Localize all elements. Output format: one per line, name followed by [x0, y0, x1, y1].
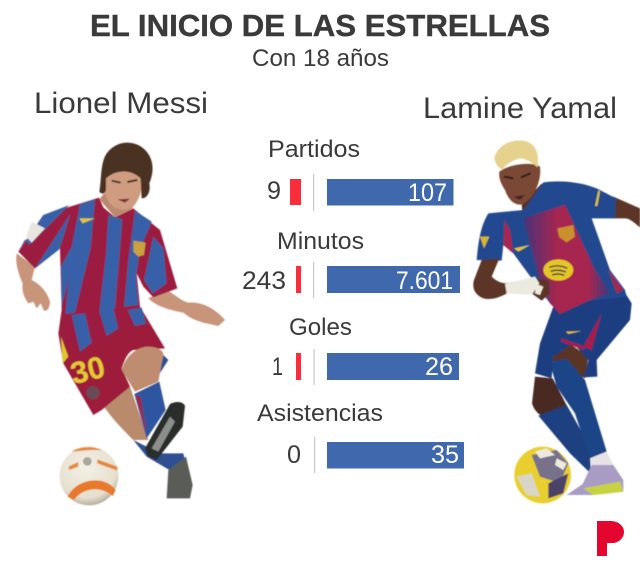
- Messi left arm: [16, 253, 50, 311]
- label: Asistencias: Asistencias: [257, 400, 383, 427]
- Yamal sponsor badge: [543, 259, 573, 281]
- player name: Lionel Messi: Lionel Messi: [34, 87, 208, 120]
- red bar: Messi goles: [296, 353, 301, 380]
- Messi rear boot: [167, 457, 193, 498]
- logo: [597, 521, 624, 556]
- value: Yamal minutos: 7.601: [396, 267, 453, 295]
- Messi shirt number: 30: [67, 350, 108, 391]
- blue bar: Yamal minutos: [327, 266, 460, 293]
- value: Messi goles: 1: [272, 353, 283, 381]
- player name: Lamine Yamal: Lamine Yamal: [423, 92, 617, 125]
- blue bar: Yamal asistencias: [327, 442, 464, 468]
- subtitle: Con 18 años: [252, 45, 389, 72]
- value: Yamal asistencias: 35: [431, 441, 459, 469]
- Messi front boot: [145, 402, 185, 460]
- blue bar: Yamal goles: [327, 353, 459, 380]
- blue bar: Yamal partidos: [327, 179, 454, 206]
- stat row: Asistencias: [257, 400, 464, 473]
- Yamal rear leg: [532, 377, 567, 419]
- value: Yamal partidos: 107: [408, 179, 447, 207]
- Messi neck: [99, 193, 133, 217]
- Yamal jersey: [477, 181, 627, 314]
- player illustration: Messi: [16, 143, 225, 505]
- Yamal right arm: [613, 197, 640, 227]
- Messi front sock: [134, 382, 166, 438]
- Messi head: [99, 143, 153, 210]
- Yamal thigh: [552, 342, 588, 378]
- value: Messi asistencias: 0: [287, 441, 301, 469]
- Yamal ball: [514, 447, 571, 503]
- Messi front thigh: [122, 347, 163, 392]
- value: Messi partidos: 9: [267, 177, 281, 205]
- red bar: Messi minutos: [296, 266, 301, 293]
- red bar: Messi partidos: [290, 179, 301, 205]
- player illustration: Yamal: [473, 141, 640, 503]
- Messi shorts: [58, 323, 165, 415]
- Yamal left arm and bandage: [473, 258, 550, 301]
- stat row: Goles: [272, 314, 459, 385]
- Yamal neck: [522, 183, 543, 220]
- Messi jersey: [18, 198, 177, 352]
- Yamal rear sock: [538, 405, 591, 473]
- label: Minutos: Minutos: [277, 228, 364, 255]
- label: Goles: Goles: [289, 314, 352, 341]
- stat row: Partidos: [267, 136, 454, 211]
- value: Messi minutos: 243: [242, 267, 286, 295]
- Messi ball: [60, 447, 118, 505]
- Messi rear leg: [102, 387, 148, 440]
- stat row: Minutos: [242, 228, 460, 298]
- Yamal front sock: [551, 359, 607, 458]
- title: EL INICIO DE LAS ESTRELLAS: [90, 8, 550, 43]
- Yamal shorts: [535, 290, 632, 378]
- Yamal head: [494, 141, 540, 205]
- value: Yamal goles: 26: [425, 353, 453, 381]
- Yamal boot: [567, 452, 623, 495]
- label: Partidos: Partidos: [268, 136, 360, 163]
- Messi right arm: [148, 289, 225, 326]
